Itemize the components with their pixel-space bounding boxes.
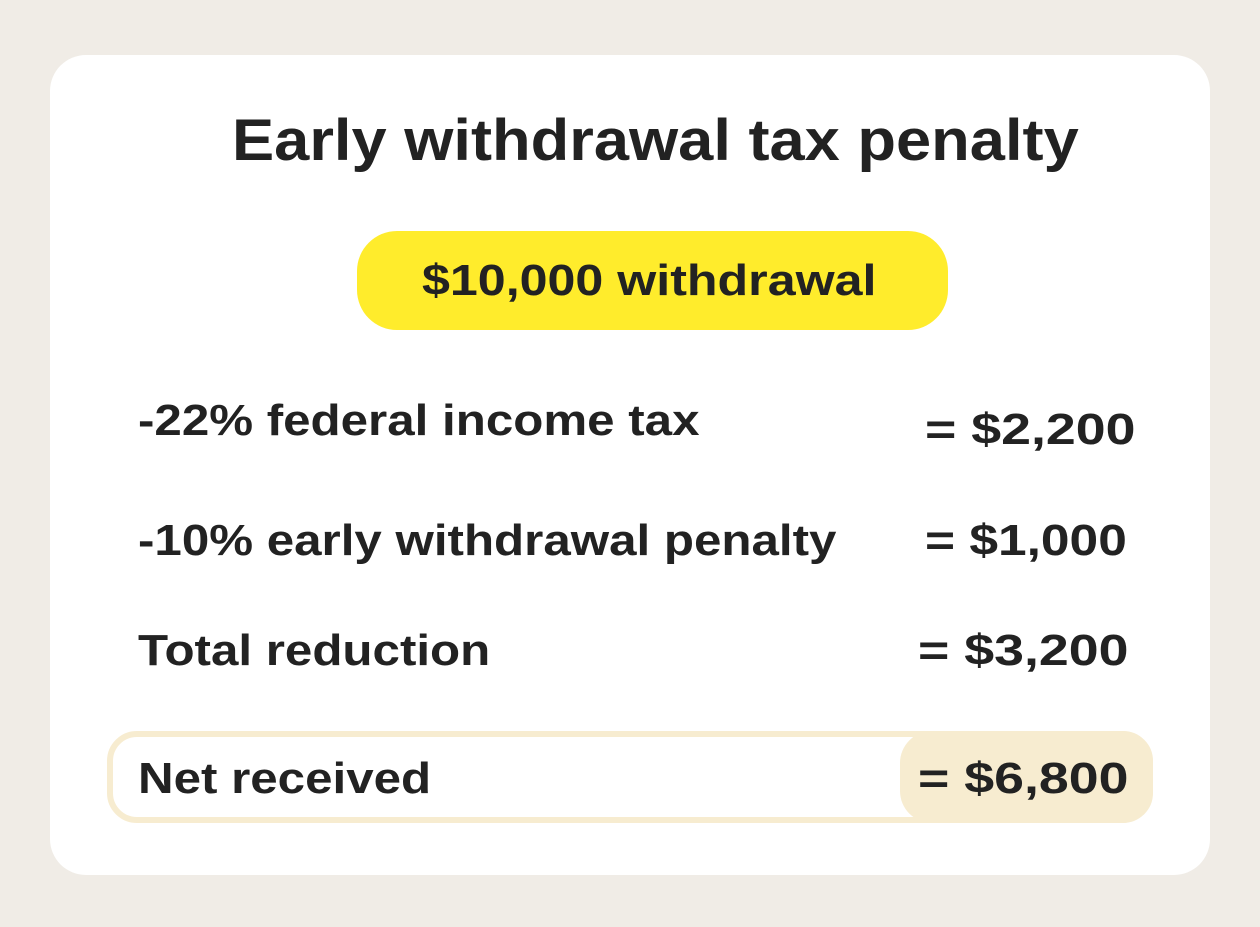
value: federal tax: = $2,200 xyxy=(925,405,1135,454)
value: penalty: = $1,000 xyxy=(925,516,1127,565)
value: total: = $3,200 xyxy=(918,626,1128,675)
row: net received box xyxy=(107,731,1153,823)
box outline xyxy=(107,731,1153,823)
row: early withdrawal penalty: -10% early withdrawal penalty xyxy=(138,516,836,565)
value: net: = $6,800 xyxy=(918,754,1128,803)
pill: withdrawal amount xyxy=(357,231,948,330)
pill text: $10,000 withdrawal xyxy=(422,256,876,305)
title: Early withdrawal tax penalty xyxy=(232,108,1079,173)
label: net received: Net received xyxy=(138,754,431,803)
row: total reduction: Total reduction xyxy=(138,626,490,675)
highlight: net value xyxy=(900,731,1153,823)
row: federal income tax: -22% federal income tax xyxy=(138,396,699,445)
